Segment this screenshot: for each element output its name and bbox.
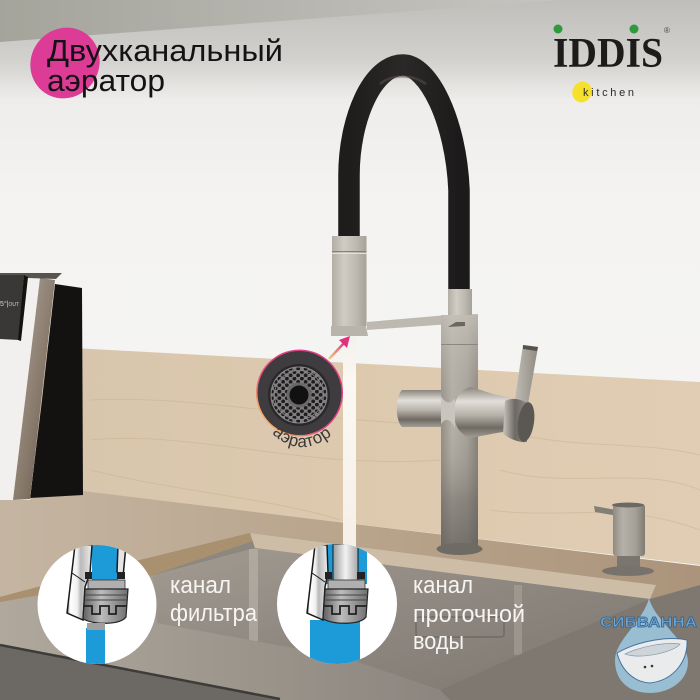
label: flow water channel: канал bbox=[413, 572, 473, 599]
label: flow water channel: воды bbox=[413, 628, 464, 655]
aerator label: аэратор bbox=[273, 428, 330, 449]
kitchen label: kitchen bbox=[583, 87, 634, 99]
appliance on the left: 5°|OUT bbox=[0, 300, 19, 308]
cartridge bbox=[83, 589, 128, 630]
pink accent blob bbox=[17, 14, 113, 112]
chrome spout cutaway bbox=[67, 545, 126, 620]
brand logo bbox=[553, 24, 670, 106]
main body bbox=[436, 315, 482, 555]
watermark bbox=[600, 598, 697, 693]
yellow blob bbox=[569, 78, 595, 106]
blue water in flow channel bbox=[310, 544, 367, 666]
appliance on the left bbox=[0, 273, 83, 500]
bathtub mascot bbox=[617, 639, 687, 683]
chrome inner tube bbox=[333, 544, 358, 582]
label: filter channel: канал bbox=[170, 572, 231, 599]
lever handle bbox=[515, 345, 538, 404]
label: flow water channel: проточной bbox=[413, 601, 525, 628]
pull-out spray head bbox=[331, 236, 368, 336]
cross joint bbox=[441, 396, 455, 428]
blue water in filter channel bbox=[86, 544, 118, 666]
chrome spout cutaway bbox=[307, 545, 365, 620]
collar bbox=[448, 289, 472, 317]
watermark text: СИБВАННА bbox=[600, 614, 697, 631]
green dots bbox=[554, 24, 638, 34]
soap dispenser bbox=[594, 502, 654, 576]
title bbox=[17, 14, 283, 112]
title text: Двухканальный bbox=[47, 33, 283, 68]
spray arm bbox=[367, 314, 478, 330]
filter channel diagram bbox=[38, 544, 156, 666]
right stem bbox=[454, 387, 510, 438]
aerator close-up bbox=[256, 350, 343, 436]
flow water channel diagram bbox=[277, 544, 397, 666]
cartridge bbox=[323, 589, 368, 623]
water stream bbox=[343, 336, 356, 548]
faucet bbox=[331, 65, 538, 555]
water drop bbox=[615, 598, 688, 693]
label: filter channel: фильтра bbox=[170, 600, 258, 627]
aerator arrow bbox=[329, 336, 350, 359]
left stem bbox=[397, 390, 441, 427]
title text: аэратор bbox=[47, 63, 165, 98]
black flexible hose bbox=[349, 65, 459, 290]
wordmark: IDDIS bbox=[553, 31, 663, 77]
registered mark: ® bbox=[664, 26, 670, 35]
side cap bbox=[503, 399, 537, 443]
